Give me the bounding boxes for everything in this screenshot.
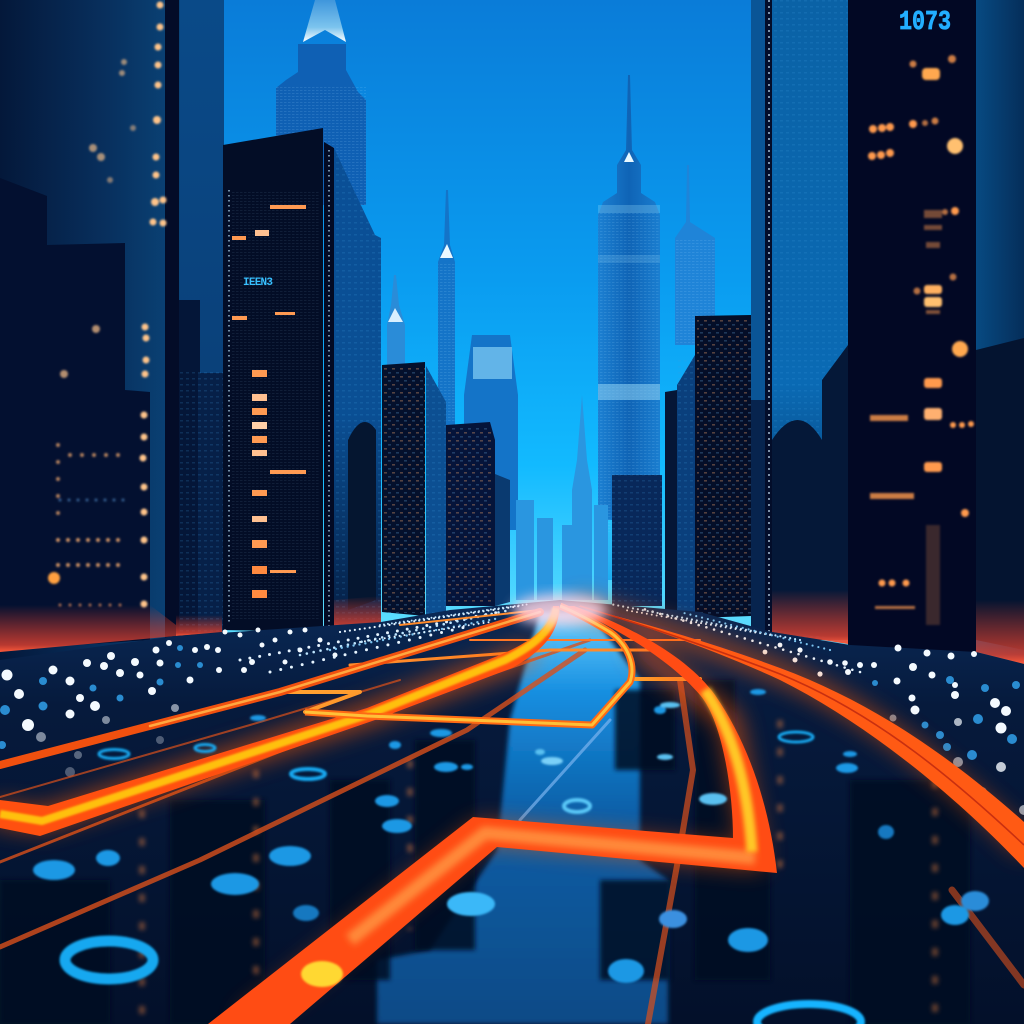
- yellow hot spot: [301, 961, 343, 987]
- glowing base: central tower: [334, 596, 381, 630]
- data dots on ground: [0, 604, 1024, 815]
- trace: foreground main: [208, 606, 777, 1024]
- tower: top left crown: [276, 0, 366, 205]
- tower: right with spire: [675, 165, 715, 345]
- window lights: right tower: [868, 55, 974, 625]
- road reflections: dark towers: [0, 680, 970, 1024]
- trace: right main: [578, 606, 1024, 868]
- sign text: right tower: 1073: [899, 8, 951, 38]
- trace: central loop: [305, 606, 632, 725]
- silhouettes reflected in the tower: [0, 178, 150, 650]
- ground plane: [0, 600, 1024, 1024]
- vanishing point glow: [512, 594, 608, 626]
- distant skyline: [276, 0, 715, 600]
- rings: [65, 732, 861, 1024]
- dots: left field: [2, 628, 338, 777]
- main orange circuit traces: [0, 606, 1024, 1024]
- glowing base: right tower: [772, 590, 848, 644]
- tower: left needle: [438, 190, 455, 425]
- mid right towers: [612, 315, 751, 618]
- sign text: central tower: IEEN3: [243, 277, 273, 289]
- blue rings and nodes on road: [33, 689, 989, 1024]
- glow under main traces: [0, 606, 1024, 1020]
- glowing base: left tower: [0, 605, 176, 652]
- tower: flat blue block: [464, 335, 518, 530]
- window lights: left tower: [48, 2, 166, 608]
- road reflections: warm window streaks: [142, 720, 935, 1024]
- dots: right field: [763, 643, 1024, 815]
- central left tower: [223, 128, 381, 632]
- left foreground tower: [0, 0, 224, 664]
- window lights: central tower: [232, 205, 306, 598]
- trace: left main: [0, 606, 559, 836]
- secondary thin orange lines: [0, 610, 1024, 1024]
- filled nodes: [33, 689, 989, 983]
- tower: small needle: [387, 275, 405, 365]
- tower: round central right: [597, 75, 661, 580]
- right foreground tower: [751, 0, 1024, 668]
- horizon towers: [516, 395, 608, 600]
- mid left towers: [382, 362, 510, 618]
- road reflection: centre blue: [377, 612, 668, 1024]
